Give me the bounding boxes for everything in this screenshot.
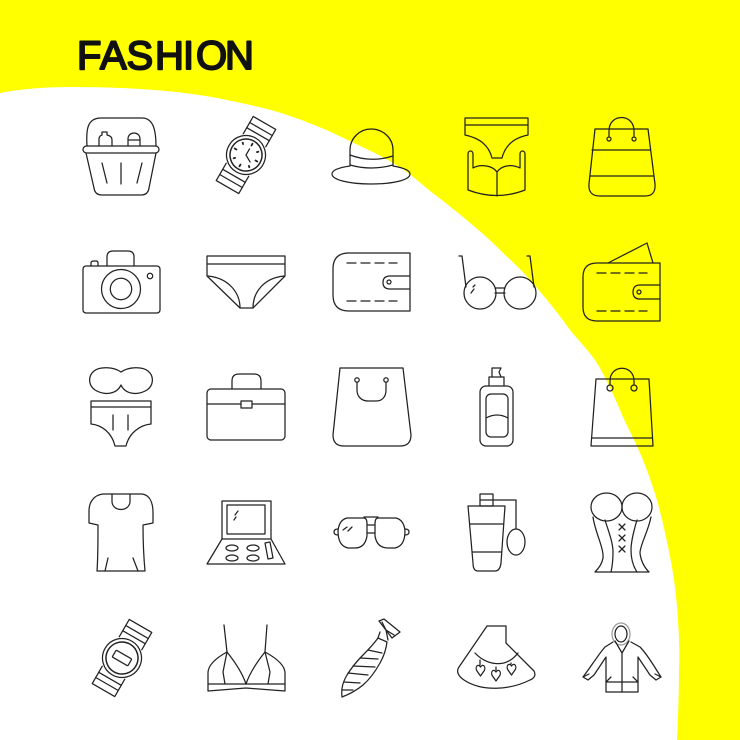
icon: corset	[591, 493, 652, 572]
icon: round glasses	[459, 256, 536, 309]
icon: wrist watch	[211, 113, 281, 197]
icon: briefs	[207, 256, 285, 308]
icon: open wallet	[583, 243, 660, 321]
icon: briefcase	[207, 374, 285, 440]
icon: hat	[332, 129, 410, 184]
title: FASHION	[77, 34, 254, 78]
icon: bralette	[208, 625, 285, 691]
icon: necktie	[342, 619, 400, 697]
icon: bag with handle	[591, 368, 653, 446]
icon: makeup palette	[207, 501, 285, 564]
icon: large shopping bag	[333, 368, 411, 446]
icon: aviator sunglasses	[334, 517, 409, 548]
icon: swimsuit set	[465, 118, 528, 196]
icon: camera	[83, 251, 160, 313]
icon: striped shopping bag	[589, 118, 655, 196]
icon: skirt with hearts	[458, 626, 535, 688]
icon: basket	[83, 118, 159, 195]
icon: t-shirt	[89, 494, 153, 571]
icon: digital watch	[87, 616, 157, 700]
icon: wallet	[333, 253, 410, 311]
icon: hoodie	[583, 623, 661, 692]
icon: lotion bottle	[480, 368, 513, 446]
icon: perfume atomiser	[468, 494, 525, 571]
icon: bikini	[90, 368, 152, 446]
